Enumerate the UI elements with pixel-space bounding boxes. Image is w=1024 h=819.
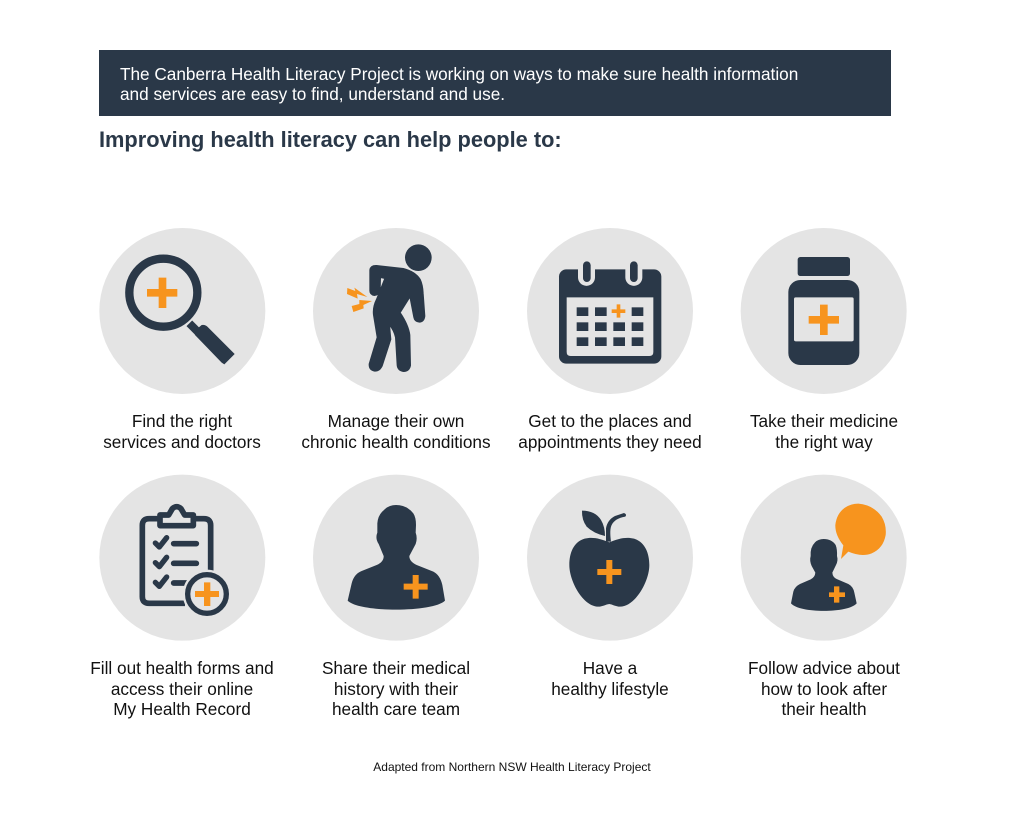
label [301,411,491,452]
label: Find the right [132,411,232,431]
icon: person with cross [313,474,479,640]
panel: follow advice [740,474,907,719]
label [748,658,900,719]
label: My Health Record [113,699,251,719]
label [551,658,669,698]
banner: project intro [99,50,891,116]
label: services and doctors [103,432,261,452]
label: how to look after [761,678,887,698]
label: access their online [111,678,253,698]
label: Have a [583,658,637,678]
label: Take their medicine [750,411,898,431]
label [322,658,470,719]
label [103,411,261,452]
label: the right way [775,432,873,452]
icon: calendar [527,228,693,394]
label: Fill out health forms and [90,658,274,678]
label [90,658,274,719]
label: healthy lifestyle [551,678,669,698]
icon: speech bubble [835,504,886,559]
label: Get to the places and [528,411,692,431]
banner: project intro: and services are easy to find, understand and use. [120,84,505,104]
label: Follow advice about [748,658,900,678]
label: health care team [332,699,460,719]
label [750,411,898,452]
icon: magnifying glass [99,228,266,394]
panel: medicine [740,228,906,452]
label: their health [781,699,867,719]
label: appointments they need [518,432,702,452]
heading: Improving health literacy can help people to: [99,127,562,152]
panel: health forms [90,474,274,719]
icon: apple [527,474,693,640]
label: chronic health conditions [301,432,491,452]
banner: project intro: The Canberra Health Literacy Project is working on ways to make sure health information [120,64,798,84]
label: history with their [334,678,458,698]
icon: person with speech bubble [740,474,907,640]
panel: appointments [518,228,702,452]
panel: medical history [313,474,479,719]
label: Share their medical [322,658,470,678]
panel: chronic conditions [301,228,491,452]
icon: person with back pain [313,228,479,394]
icon: medicine bottle [740,228,906,394]
panel: healthy lifestyle [527,474,693,698]
label: Manage their own [328,411,464,431]
icon: clipboard with checklist [99,474,266,640]
footer credit: Adapted from Northern NSW Health Literacy Project [373,760,651,774]
label [518,411,702,452]
panel: find services [99,228,266,452]
